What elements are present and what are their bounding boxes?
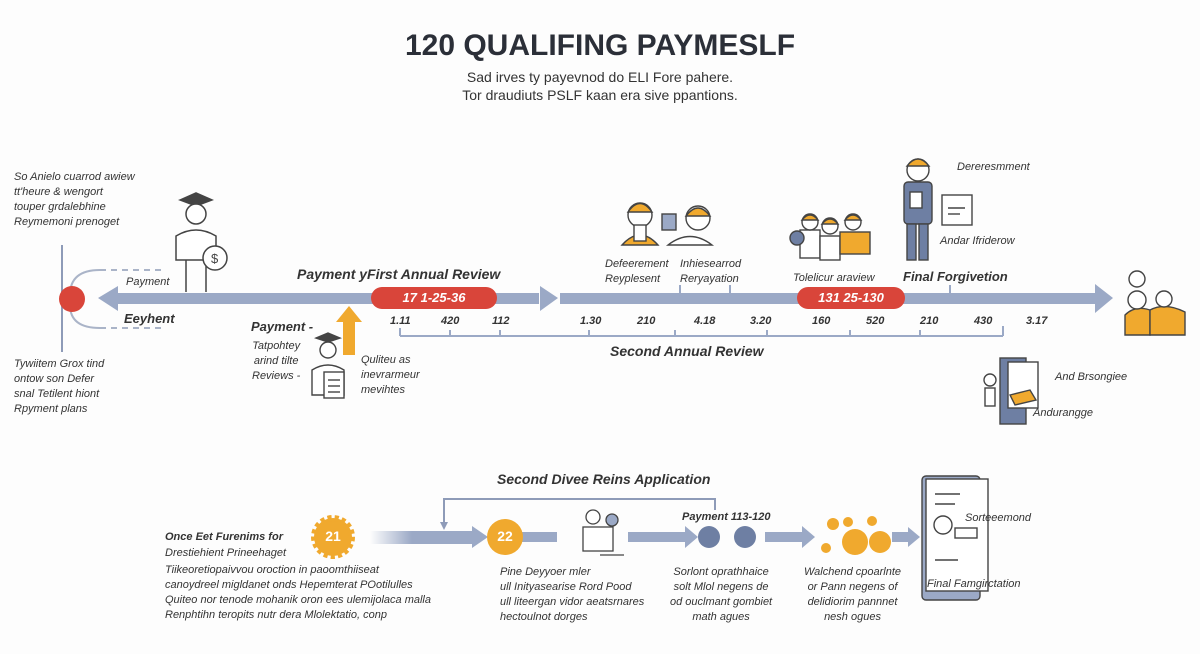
text: 4.18 bbox=[694, 315, 715, 327]
text: 160 bbox=[812, 315, 830, 327]
text: math agues bbox=[692, 611, 750, 623]
left texts: Reymemoni prenoget bbox=[14, 216, 119, 228]
middle labels bbox=[605, 258, 669, 285]
text: canoydreel migldanet onds Hepemterat POotilulles bbox=[165, 579, 413, 591]
scale line bbox=[400, 285, 1003, 336]
icon: man with laptop bbox=[904, 159, 972, 260]
text: Andar Ifriderow bbox=[940, 235, 1015, 247]
text: 1.30 bbox=[580, 315, 601, 327]
text: Dereresmment bbox=[957, 161, 1030, 173]
icon: team of three bbox=[790, 214, 870, 260]
left texts: touper grdalebhine bbox=[14, 201, 106, 213]
text: Renphtihn teropits nutr dera Mlolektatio, conp bbox=[165, 609, 387, 621]
icon: graduate with document bbox=[312, 333, 344, 398]
icon: group with linked circles bbox=[1125, 271, 1185, 335]
text: Drestiehient Prineehaget bbox=[165, 547, 286, 559]
pill labels: 17 1-25-36 bbox=[403, 290, 465, 305]
text: Tolelicur araview bbox=[793, 272, 875, 284]
text: Tatpohtey bbox=[252, 340, 300, 352]
text: Final Forgivetion bbox=[903, 269, 1008, 284]
text: Tiikeoretiopaivvou oroction in paoomthiiseat bbox=[165, 564, 379, 576]
subtitle: Sad irves ty payevnod do ELI Fore pahere. bbox=[467, 69, 733, 85]
text: Payment 113-120 bbox=[682, 511, 770, 523]
text: Andurangge bbox=[1033, 407, 1093, 419]
text: Reryayation bbox=[680, 273, 739, 285]
headings on timeline: Payment yFirst Annual Review bbox=[297, 266, 500, 282]
left bracket bbox=[62, 245, 165, 352]
gear 21 bbox=[314, 518, 352, 556]
main timeline bar bbox=[98, 284, 1113, 313]
icon: graduate with money bbox=[176, 193, 227, 292]
left texts: tt'heure & wengort bbox=[14, 186, 103, 198]
title: 120 QUALIFING PAYMESLF bbox=[405, 29, 795, 62]
text: Reviews - bbox=[252, 370, 300, 382]
bottom heading: Second Divee Reins Application bbox=[497, 471, 710, 487]
orange up arrow bbox=[336, 306, 362, 355]
bottom step numbers: 21 bbox=[325, 528, 341, 544]
text: inevrarmeur bbox=[361, 369, 420, 381]
text: Tywiitem Grox tind bbox=[14, 358, 104, 370]
icon: gears bbox=[821, 516, 891, 555]
text: Rpyment plans bbox=[14, 403, 87, 415]
text: 210 bbox=[637, 315, 655, 327]
text: Walchend cpoarlnte bbox=[804, 566, 901, 578]
text: 520 bbox=[866, 315, 884, 327]
text: And Brsongiee bbox=[1055, 371, 1127, 383]
subtitle bbox=[462, 69, 738, 103]
icon: graduate with money: $ bbox=[211, 251, 219, 266]
text: delidiorim pannnet bbox=[808, 596, 897, 608]
subtitle: Tor draudiuts PSLF kaan era sive ppantions. bbox=[462, 87, 738, 103]
icon: two people reviewing bbox=[622, 203, 712, 245]
text: 210 bbox=[920, 315, 938, 327]
text: Sorlont oprathhaice bbox=[673, 566, 769, 578]
text: Inhiesearrod bbox=[680, 258, 741, 270]
middle labels: Reyplesent bbox=[605, 273, 660, 285]
text: hectoulnot dorges bbox=[500, 611, 587, 623]
icon: computer user bbox=[583, 510, 624, 555]
number labels: 1.11 bbox=[390, 315, 411, 327]
text: solt Mlol negens de bbox=[674, 581, 768, 593]
text: nesh ogues bbox=[824, 611, 881, 623]
left texts: So Anielo cuarrod awiew bbox=[14, 171, 135, 183]
text: Sorteeemond bbox=[965, 512, 1031, 524]
middle labels: Defeerement bbox=[605, 258, 669, 270]
text: or Pann negens of bbox=[808, 581, 897, 593]
text: Payment - bbox=[251, 319, 313, 334]
icons: payment circles bbox=[698, 526, 720, 548]
text: Payment bbox=[126, 276, 169, 288]
text: 430 bbox=[974, 315, 992, 327]
text: Pine Deyyoer mler bbox=[500, 566, 590, 578]
text: Second Annual Review bbox=[610, 343, 764, 359]
bottom texts: Once Eet Furenims for bbox=[165, 531, 283, 543]
left texts bbox=[14, 171, 136, 228]
text: Quliteu as bbox=[361, 354, 411, 366]
text: ull liteergan vidor aeatsrnares bbox=[500, 596, 644, 608]
red start circle bbox=[59, 286, 85, 312]
bottom flow bbox=[444, 499, 715, 525]
icon: document bbox=[922, 476, 988, 600]
text: 131 25-130 bbox=[818, 290, 884, 305]
text: Final Famgirctation bbox=[927, 578, 1021, 590]
text: 3.20 bbox=[750, 315, 771, 327]
text: mevihtes bbox=[361, 384, 405, 396]
icon: person with door bbox=[984, 358, 1038, 424]
text: ull Inityasearise Rord Pood bbox=[500, 581, 631, 593]
red pills bbox=[371, 287, 497, 309]
text: snal Tetilent hiont bbox=[14, 388, 99, 400]
text: ontow son Defer bbox=[14, 373, 94, 385]
text: od ouclmant gombiet bbox=[670, 596, 772, 608]
text: 22 bbox=[497, 528, 513, 544]
text: Quiteo nor tenode mohanik oron ees ulemijolaca malla bbox=[165, 594, 431, 606]
text: 420 bbox=[441, 315, 459, 327]
text: 3.17 bbox=[1026, 315, 1047, 327]
text: 112 bbox=[492, 315, 510, 327]
text: Eeyhent bbox=[124, 311, 175, 326]
text: arind tilte bbox=[254, 355, 298, 367]
